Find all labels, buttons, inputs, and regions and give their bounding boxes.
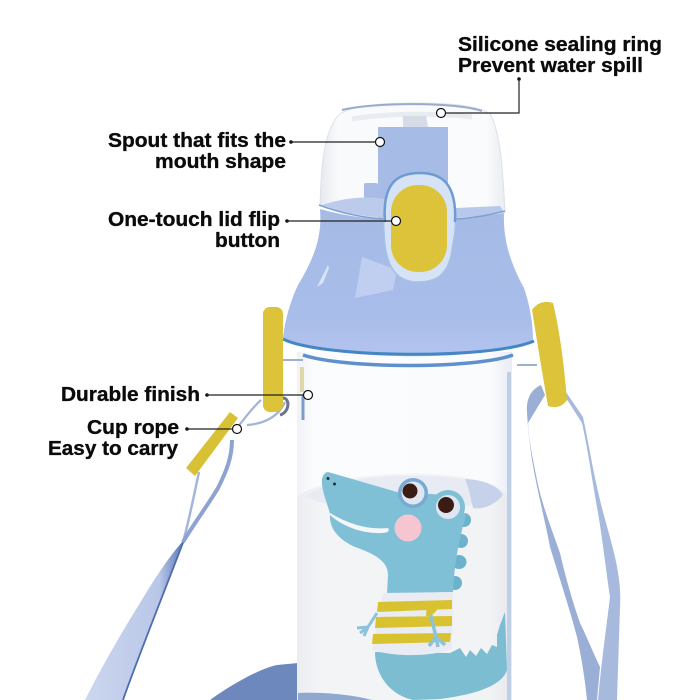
callout: spout: mouth shape xyxy=(155,150,286,173)
spout xyxy=(364,116,448,218)
shirt xyxy=(372,592,453,655)
nostrils xyxy=(326,477,330,480)
callout: durable finish: Durable finish xyxy=(61,383,200,406)
bottom strap band xyxy=(210,663,298,700)
cheek xyxy=(394,514,422,542)
callout: durable finish xyxy=(61,383,312,406)
callout: cup rope xyxy=(48,416,242,460)
callout: cup rope: Cup rope xyxy=(87,416,179,439)
bottle body xyxy=(283,352,537,700)
lid dome xyxy=(320,103,505,213)
callout: flip button: button xyxy=(215,229,280,252)
callout: silicone sealing ring: Silicone sealing ring xyxy=(458,33,662,56)
tail and lower body xyxy=(375,612,507,700)
callout: flip button xyxy=(108,208,400,252)
right shoulder strap xyxy=(527,385,620,700)
left yellow clip xyxy=(263,307,288,415)
callout: spout xyxy=(108,129,384,173)
illustration: crocodile xyxy=(322,472,507,700)
cap body xyxy=(283,197,534,366)
callout: silicone sealing ring: Prevent water spill xyxy=(458,54,643,77)
left shoulder strap xyxy=(85,400,285,700)
mouth xyxy=(330,513,389,533)
back spikes xyxy=(448,513,471,590)
callout: cup rope: Easy to carry xyxy=(48,437,179,460)
lid flip button xyxy=(384,172,455,282)
strap yellow slider xyxy=(186,412,238,476)
arms xyxy=(357,613,377,636)
callout: silicone sealing ring xyxy=(436,33,662,118)
eyes xyxy=(398,478,428,508)
head and neck xyxy=(322,472,466,594)
right yellow clip xyxy=(532,302,567,407)
callout: flip button: One-touch lid flip xyxy=(108,208,280,231)
callout: spout: Spout that fits the xyxy=(108,129,286,152)
